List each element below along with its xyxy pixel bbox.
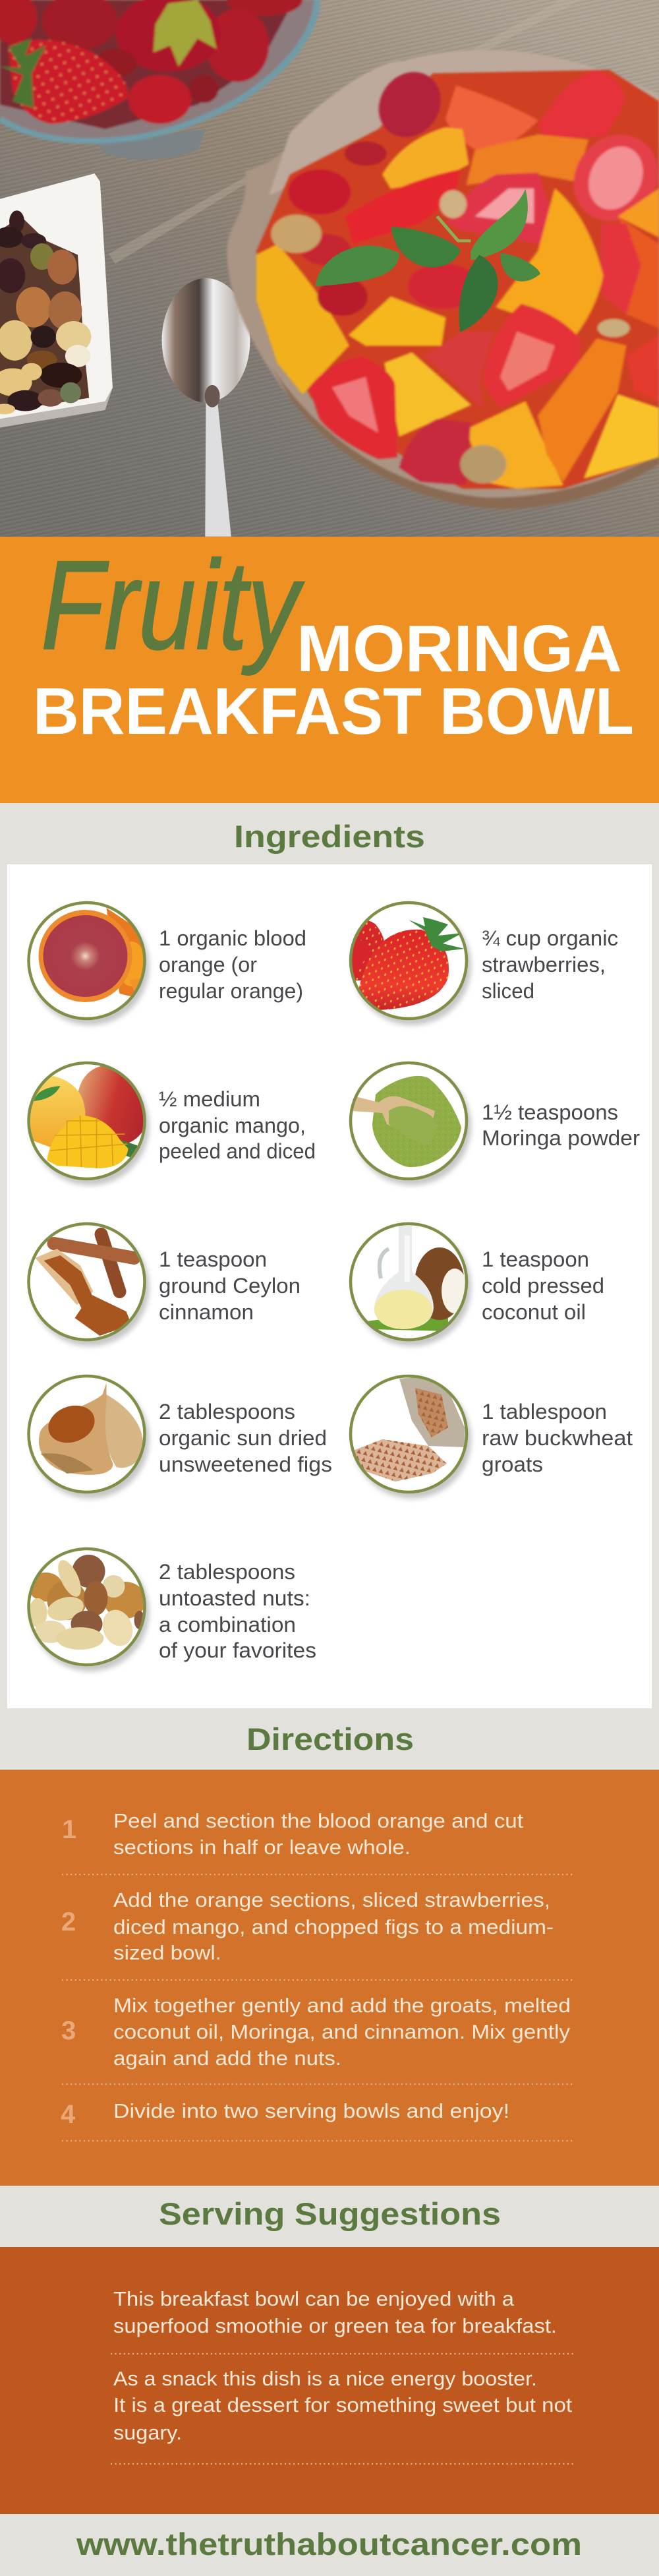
suggestion: breakfast: This breakfast bowl can be enjoyed with a [113, 2287, 515, 2310]
large glass bowl [227, 50, 659, 509]
ingredient text [482, 1100, 640, 1150]
ingredient text: 1½ teaspoons [482, 1100, 618, 1124]
title band [0, 534, 659, 803]
ingredient text: groats [482, 1453, 543, 1476]
ingredient text: 1 teaspoon [482, 1247, 589, 1271]
title script: Fruity: Fruity [41, 534, 304, 676]
spoon [162, 278, 250, 537]
title: BREAKFAST BOWL: BREAKFAST BOWL [33, 674, 634, 748]
panel: directions [0, 1770, 659, 2186]
ingredient text: coconut oil [482, 1300, 586, 1324]
ingredient text: cinnamon [159, 1300, 254, 1324]
ingredient text: orange (or [159, 953, 257, 976]
step 3: Mix together gently and add the groats, melted [113, 1994, 571, 2017]
ingredient text: untoasted nuts: [159, 1586, 310, 1610]
ingredient text: sliced [482, 979, 534, 1003]
step 2: Add the orange sections, sliced strawberries, [113, 1888, 550, 1911]
ingredient text [159, 1247, 301, 1324]
heading: Serving Suggestions: Serving Suggestions [159, 2196, 501, 2231]
icon: moringa powder [351, 1063, 471, 1185]
hero photo: fruit bowl on wooden table [0, 0, 659, 537]
glass bowl with strawberries [0, 0, 318, 141]
icon: dried figs [29, 1376, 149, 1499]
ingredient text: Moringa powder [482, 1126, 640, 1150]
suggestion: snack [113, 2367, 572, 2444]
ingredient text [159, 926, 306, 1003]
heading: Directions: Directions [246, 1722, 414, 1756]
step 4 [61, 2099, 509, 2129]
step 4: 4 [61, 2100, 76, 2129]
ingredient text [482, 926, 618, 1003]
ingredient text: strawberries, [482, 953, 606, 976]
ingredient text: organic sun dried [159, 1426, 327, 1450]
white dish of mixed nuts [0, 173, 113, 428]
fruit salad [256, 66, 659, 489]
suggestion: snack: sugary. [113, 2421, 182, 2444]
step 1: Peel and section the blood orange and cut [113, 1809, 523, 1832]
ingredient: nuts [29, 1549, 316, 1671]
title: MORINGA: MORINGA [297, 612, 622, 686]
step 2: 2 [61, 1907, 76, 1936]
ingredient text: 1 tablespoon [482, 1400, 607, 1423]
mint sprig [315, 189, 540, 332]
icon: mango [27, 1062, 152, 1188]
ingredient text: unsweetened figs [159, 1453, 332, 1476]
ingredient text: ground Ceylon [159, 1274, 301, 1298]
suggestion: snack: It is a great dessert for something sweet but not [113, 2393, 572, 2416]
ingredient text [482, 1247, 604, 1324]
ingredient: moringa powder [351, 1063, 640, 1185]
ingredient text: regular orange) [159, 979, 303, 1003]
icon: coconut oil [351, 1224, 471, 1346]
ingredient text: peeled and diced [159, 1139, 316, 1163]
ingredient text [159, 1560, 316, 1662]
heading: Ingredients: Ingredients [234, 819, 425, 854]
ingredient: mango [24, 1054, 316, 1185]
ingredient text: 2 tablespoons [159, 1560, 295, 1584]
ingredient text: ¾ cup organic [482, 926, 618, 950]
step 3: coconut oil, Moringa, and cinnamon. Mix gently [113, 2020, 571, 2043]
panel: serving suggestions [0, 2247, 659, 2514]
suggestion: breakfast: superfood smoothie or green tea for breakfast. [113, 2314, 557, 2337]
ingredient text: ½ medium [159, 1087, 260, 1111]
step 2 [61, 1888, 554, 1964]
ingredient: cinnamon [29, 1224, 301, 1346]
suggestion: snack: As a snack this dish is a nice energy booster. [113, 2367, 537, 2390]
ingredient: coconut oil [351, 1224, 604, 1346]
icon: cinnamon [29, 1224, 149, 1346]
ingredient: strawberries [349, 903, 618, 1025]
step 3: 3 [61, 2016, 76, 2045]
icon: strawberry [349, 903, 471, 1025]
suggestion: breakfast [113, 2287, 557, 2337]
ingredient: figs [29, 1376, 332, 1499]
icon: buckwheat groats [351, 1375, 471, 1499]
ingredient text: organic mango, [159, 1114, 306, 1137]
step 2: diced mango, and chopped figs to a medium- [113, 1915, 554, 1938]
ingredient text: a combination [159, 1613, 296, 1636]
ingredient: blood orange [29, 903, 306, 1025]
icon: blood orange [29, 903, 149, 1025]
icon: mixed nuts [29, 1549, 149, 1671]
step 3: again and add the nuts. [113, 2047, 341, 2070]
ingredient text: 1 organic blood [159, 926, 306, 950]
ingredient text: of your favorites [159, 1638, 316, 1662]
step 1: 1 [62, 1815, 76, 1844]
ingredient: buckwheat [351, 1375, 633, 1499]
ingredient text [159, 1087, 316, 1163]
ingredient text: 1 teaspoon [159, 1247, 267, 1271]
footer url: www.thetruthaboutcancer.com [76, 2527, 582, 2561]
panel: ingredients [7, 864, 652, 1708]
step 1: sections in half or leave whole. [113, 1836, 411, 1859]
step 4: Divide into two serving bowls and enjoy! [113, 2099, 509, 2122]
step 2: sized bowl. [113, 1941, 221, 1964]
pedestal of glass bowl [97, 129, 206, 160]
ingredient text: raw buckwheat [482, 1426, 633, 1450]
step 3 [61, 1994, 571, 2070]
ingredient text: 2 tablespoons [159, 1400, 295, 1423]
ingredient text: cold pressed [482, 1274, 604, 1298]
step 1 [62, 1809, 523, 1859]
ingredient text [482, 1400, 633, 1476]
ingredient text [159, 1400, 332, 1476]
